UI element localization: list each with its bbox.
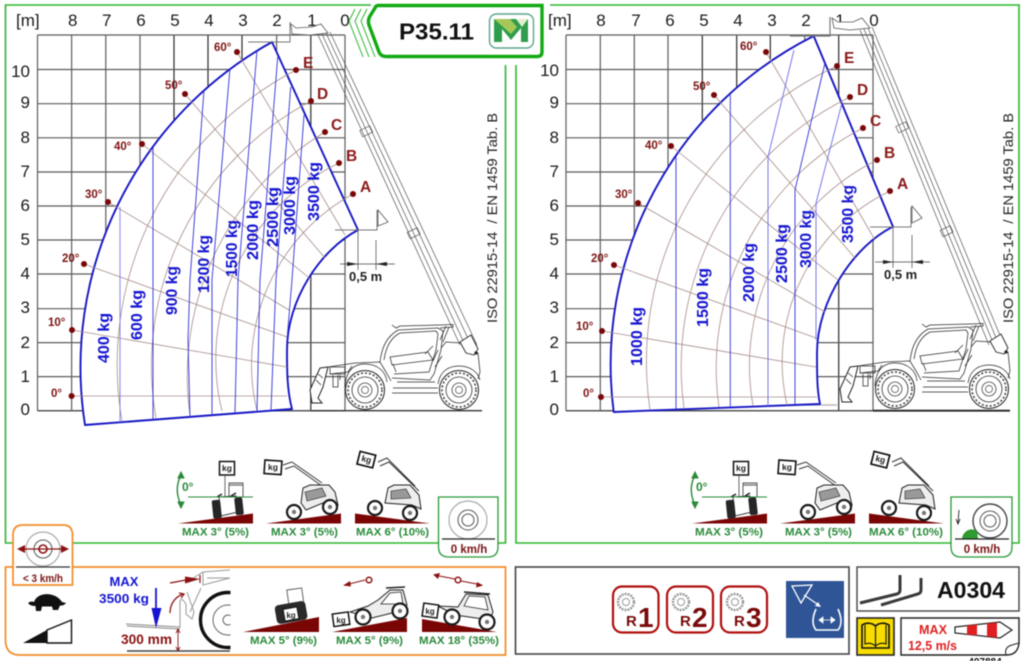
callout: right 0 km/h wheel with chock: 0 km/h	[964, 544, 1000, 556]
icon: orange slope 3: kg	[425, 607, 435, 616]
max load text: 3500 kg	[99, 591, 149, 606]
right chart axis numbers: 5	[699, 11, 709, 30]
left chart angle and boom markers: 50°	[165, 80, 183, 92]
right chart capacity labels: 1500 kg	[695, 268, 712, 327]
green slope labels left panel: MAX 6° (10%)	[356, 526, 429, 538]
left chart angle and boom markers: A	[360, 179, 371, 196]
left chart axis numbers: 9	[21, 93, 30, 112]
right chart axis numbers: 3	[550, 298, 559, 317]
icon: yellow operator manual	[857, 618, 894, 655]
left chart capacity labels: 1500 kg	[224, 220, 241, 277]
right chart axis numbers: [m]	[548, 11, 572, 30]
icon: orange slope 2: kg	[336, 616, 346, 625]
right chart angle and boom markers: 0°	[583, 388, 594, 400]
left chart axis numbers: 5	[170, 11, 180, 30]
callout: left 0 km/h wheel	[438, 497, 498, 557]
left chart angle and boom markers: 60°	[214, 42, 232, 54]
left chart capacity labels: 600 kg	[129, 290, 146, 340]
right chart angle and boom markers: 50°	[693, 81, 711, 93]
left chart axis numbers: 6	[21, 196, 30, 215]
left chart brown angle lines and reach arcs	[72, 52, 353, 421]
left chart axis numbers: 8	[68, 11, 77, 30]
icon: slope wedge	[23, 620, 72, 643]
left chart angle and boom markers: 10°	[48, 317, 66, 329]
right chart angle and boom markers: E	[844, 50, 854, 67]
icon: orange slope 1: kg	[286, 611, 296, 620]
panel: orange travel conditions	[6, 525, 506, 655]
icon: R1 badge	[613, 586, 658, 633]
right chart capacity labels: 2500 kg	[774, 224, 791, 283]
left chart axis numbers: 2	[272, 11, 282, 30]
right chart axis numbers: 0	[550, 400, 559, 419]
icon: forks	[860, 575, 921, 605]
icon: orange slope 2	[332, 577, 408, 647]
right chart angle and boom markers: 60°	[740, 41, 758, 53]
left chart capacity labels	[96, 162, 323, 363]
right chart axis numbers: 8	[596, 11, 606, 30]
right chart telescopic boom and forks	[790, 17, 1004, 345]
right chart axis numbers: 2	[550, 333, 559, 352]
left chart load envelope	[80, 42, 358, 425]
left chart axis numbers: 8	[21, 128, 30, 147]
right chart brown angle lines and reach arcs	[601, 52, 890, 410]
left chart telescopic boom and forks	[248, 22, 477, 345]
left chart axis numbers: 4	[21, 264, 30, 283]
right chart angle and boom markers: 20°	[591, 253, 609, 265]
right chart axis numbers: 7	[550, 162, 559, 181]
icon: R3 badge: 3	[746, 602, 762, 633]
green slope labels left panel: kg	[360, 453, 373, 465]
green slope labels right panel: MAX 3° (5%)	[695, 526, 763, 538]
left chart capacity labels: 2000 kg	[245, 200, 262, 260]
green slope labels right panel: kg	[782, 462, 792, 472]
left chart standard note: ISO 22915-14 / EN 1459 Tab. B	[485, 113, 501, 323]
left chart capacity labels: 1200 kg	[196, 235, 213, 293]
callout: under 3 km/h wheel: < 3 km/h	[23, 573, 63, 585]
left chart angle and boom markers: 40°	[114, 141, 132, 153]
left chart axis numbers: [m]	[16, 11, 40, 30]
callout: right 0 km/h wheel with chock	[951, 497, 1012, 557]
left chart angle and boom markers: 0°	[51, 388, 62, 400]
icon: R3 badge: R	[734, 613, 745, 630]
icon: orange slope 1: MAX 5° (9%)	[250, 635, 317, 647]
right chart angle and boom markers: 40°	[645, 140, 663, 152]
icon: R2 badge: R	[680, 613, 691, 630]
right chart axis numbers: 4	[733, 11, 743, 30]
left chart axis numbers: 3	[238, 11, 248, 30]
left chart axis numbers: 0	[21, 400, 30, 419]
right chart angle and boom markers: D	[857, 82, 868, 99]
left chart 0,5 m dimension	[340, 230, 395, 284]
green slope labels right panel: MAX 6° (10%)	[869, 526, 943, 538]
right chart axis numbers: 2	[801, 11, 811, 30]
left chart capacity labels: 3500 kg	[306, 162, 323, 221]
panel: left load chart frame	[6, 5, 506, 543]
panel: max wind speed: MAX	[919, 622, 947, 637]
max load text: MAX	[110, 574, 139, 589]
green slope labels left panel: 0°	[182, 480, 194, 494]
icon: orange slope 2: MAX 5° (9%)	[336, 635, 403, 647]
icon: windsock	[955, 622, 1012, 638]
right chart telehandler drawing	[840, 324, 1010, 411]
green slope labels right panel: 0°	[696, 480, 708, 494]
left chart axis numbers: 7	[102, 11, 111, 30]
left chart grid	[38, 35, 345, 411]
left chart axis numbers: 2	[21, 333, 30, 352]
left chart blue capacity lines	[120, 51, 304, 422]
left chart angle and boom markers: B	[346, 148, 357, 165]
green slope labels right panel: MAX 3° (5%)	[785, 526, 852, 538]
left chart 0,5 m dimension: 0,5 m	[349, 269, 382, 284]
green slope labels left panel: MAX 3° (5%)	[271, 526, 338, 538]
left chart axis numbers: 7	[21, 162, 30, 181]
left chart telehandler drawing	[310, 324, 482, 411]
left chart angle and boom markers	[48, 42, 371, 400]
right chart axis numbers: 5	[550, 230, 559, 249]
right chart capacity labels: 3500 kg	[840, 185, 857, 243]
model tab with logo	[349, 6, 542, 57]
icon: orange slope 3: MAX 18° (35%)	[419, 635, 499, 647]
right chart capacity labels: 3000 kg	[798, 210, 815, 268]
left chart axis numbers: 0	[340, 11, 350, 30]
panel: max wind speed	[901, 618, 1019, 655]
fork code text: A0304	[937, 577, 1005, 603]
icon: R3 badge	[721, 586, 767, 633]
right chart axis numbers: 6	[665, 11, 675, 30]
left chart axis numbers: 1	[307, 11, 317, 30]
green slope labels left panel: kg	[268, 462, 278, 472]
icon: turtle	[28, 594, 66, 611]
icon: orange slope 1	[243, 588, 319, 647]
green slope labels right panel: kg	[736, 463, 746, 473]
green slope icons left panel	[177, 451, 430, 524]
panel: fork code	[857, 567, 1019, 611]
right chart capacity labels: 2000 kg	[741, 243, 758, 302]
left chart angle and boom markers: D	[317, 86, 328, 103]
right chart standard note: ISO 22915-14 / EN 1459 Tab. B	[1001, 113, 1017, 323]
right chart angle and boom markers: 30°	[615, 189, 633, 201]
icon: R2 badge: 2	[692, 602, 708, 633]
right chart capacity labels: 1000 kg	[629, 307, 646, 366]
right chart 0,5 m dimension: 0,5 m	[884, 267, 917, 282]
right chart axis numbers: 1	[550, 367, 559, 386]
right chart load envelope	[611, 36, 893, 412]
icon: R2 badge	[667, 586, 713, 633]
green slope icons right panel	[691, 451, 944, 524]
right chart axis numbers: 7	[631, 11, 641, 30]
right chart axis numbers: 6	[550, 196, 559, 215]
left chart axis numbers: 6	[136, 11, 146, 30]
right chart blue capacity lines	[676, 50, 842, 410]
model name: P35.11	[399, 18, 474, 44]
icon: R1 badge: R	[626, 613, 637, 630]
left chart capacity labels: 3000 kg	[282, 176, 299, 235]
left chart axis numbers: 1	[21, 367, 30, 386]
callout: under 3 km/h wheel	[13, 525, 72, 585]
left chart angle and boom markers: E	[303, 55, 313, 72]
right chart axis numbers: 0	[869, 11, 879, 30]
right chart axis numbers: 10	[540, 61, 559, 80]
right chart axis numbers: 9	[550, 93, 559, 112]
right chart angle and boom markers: C	[870, 113, 881, 130]
green slope labels left panel: kg	[222, 463, 232, 473]
right chart angle and boom markers: 10°	[576, 321, 594, 333]
left chart capacity labels: 900 kg	[164, 266, 181, 315]
left chart capacity labels: 2500 kg	[265, 187, 282, 247]
right chart axis numbers	[540, 11, 879, 419]
left chart angle and boom markers: 30°	[85, 189, 103, 201]
icon: logo	[490, 14, 534, 48]
callout: left 0 km/h wheel: 0 km/h	[451, 544, 487, 556]
left chart angle and boom markers: C	[331, 117, 342, 134]
green slope labels right panel	[695, 453, 943, 538]
icon: orange slope 3	[419, 573, 499, 647]
left chart capacity labels: 400 kg	[96, 313, 113, 363]
left chart angle and boom markers: 20°	[62, 253, 80, 265]
right chart angle and boom markers: A	[897, 176, 908, 193]
panel: right load chart frame	[516, 5, 1019, 543]
panel: tyre options and inspection	[516, 567, 849, 654]
icon: tyre inspection sign	[786, 581, 844, 638]
right chart capacity labels	[629, 185, 857, 366]
right chart axis numbers: 8	[550, 128, 559, 147]
right chart angle and boom markers: B	[884, 145, 895, 162]
green slope labels right panel: kg	[874, 453, 887, 465]
right chart axis numbers: 1	[835, 11, 845, 30]
left chart axis numbers: 4	[204, 11, 214, 30]
max load text	[99, 574, 149, 606]
left chart axis numbers	[11, 11, 350, 419]
right chart angle and boom markers	[576, 41, 908, 400]
icon: transport position diagram	[120, 569, 232, 653]
panel: max wind speed: 12,5 m/s	[908, 638, 957, 653]
left chart axis numbers: 10	[11, 62, 30, 81]
right chart axis numbers: 3	[767, 11, 777, 30]
icon: R1 badge: 1	[638, 602, 654, 633]
right chart axis numbers: 4	[550, 264, 559, 283]
green slope labels left panel	[182, 453, 429, 538]
left chart axis numbers: 3	[21, 298, 30, 317]
green slope labels left panel: MAX 3° (5%)	[182, 526, 249, 538]
right chart 0,5 m dimension	[875, 227, 930, 282]
icon: transport position diagram: 300 mm	[121, 631, 172, 647]
left chart axis numbers: 5	[21, 230, 30, 249]
right chart grid	[566, 35, 873, 411]
